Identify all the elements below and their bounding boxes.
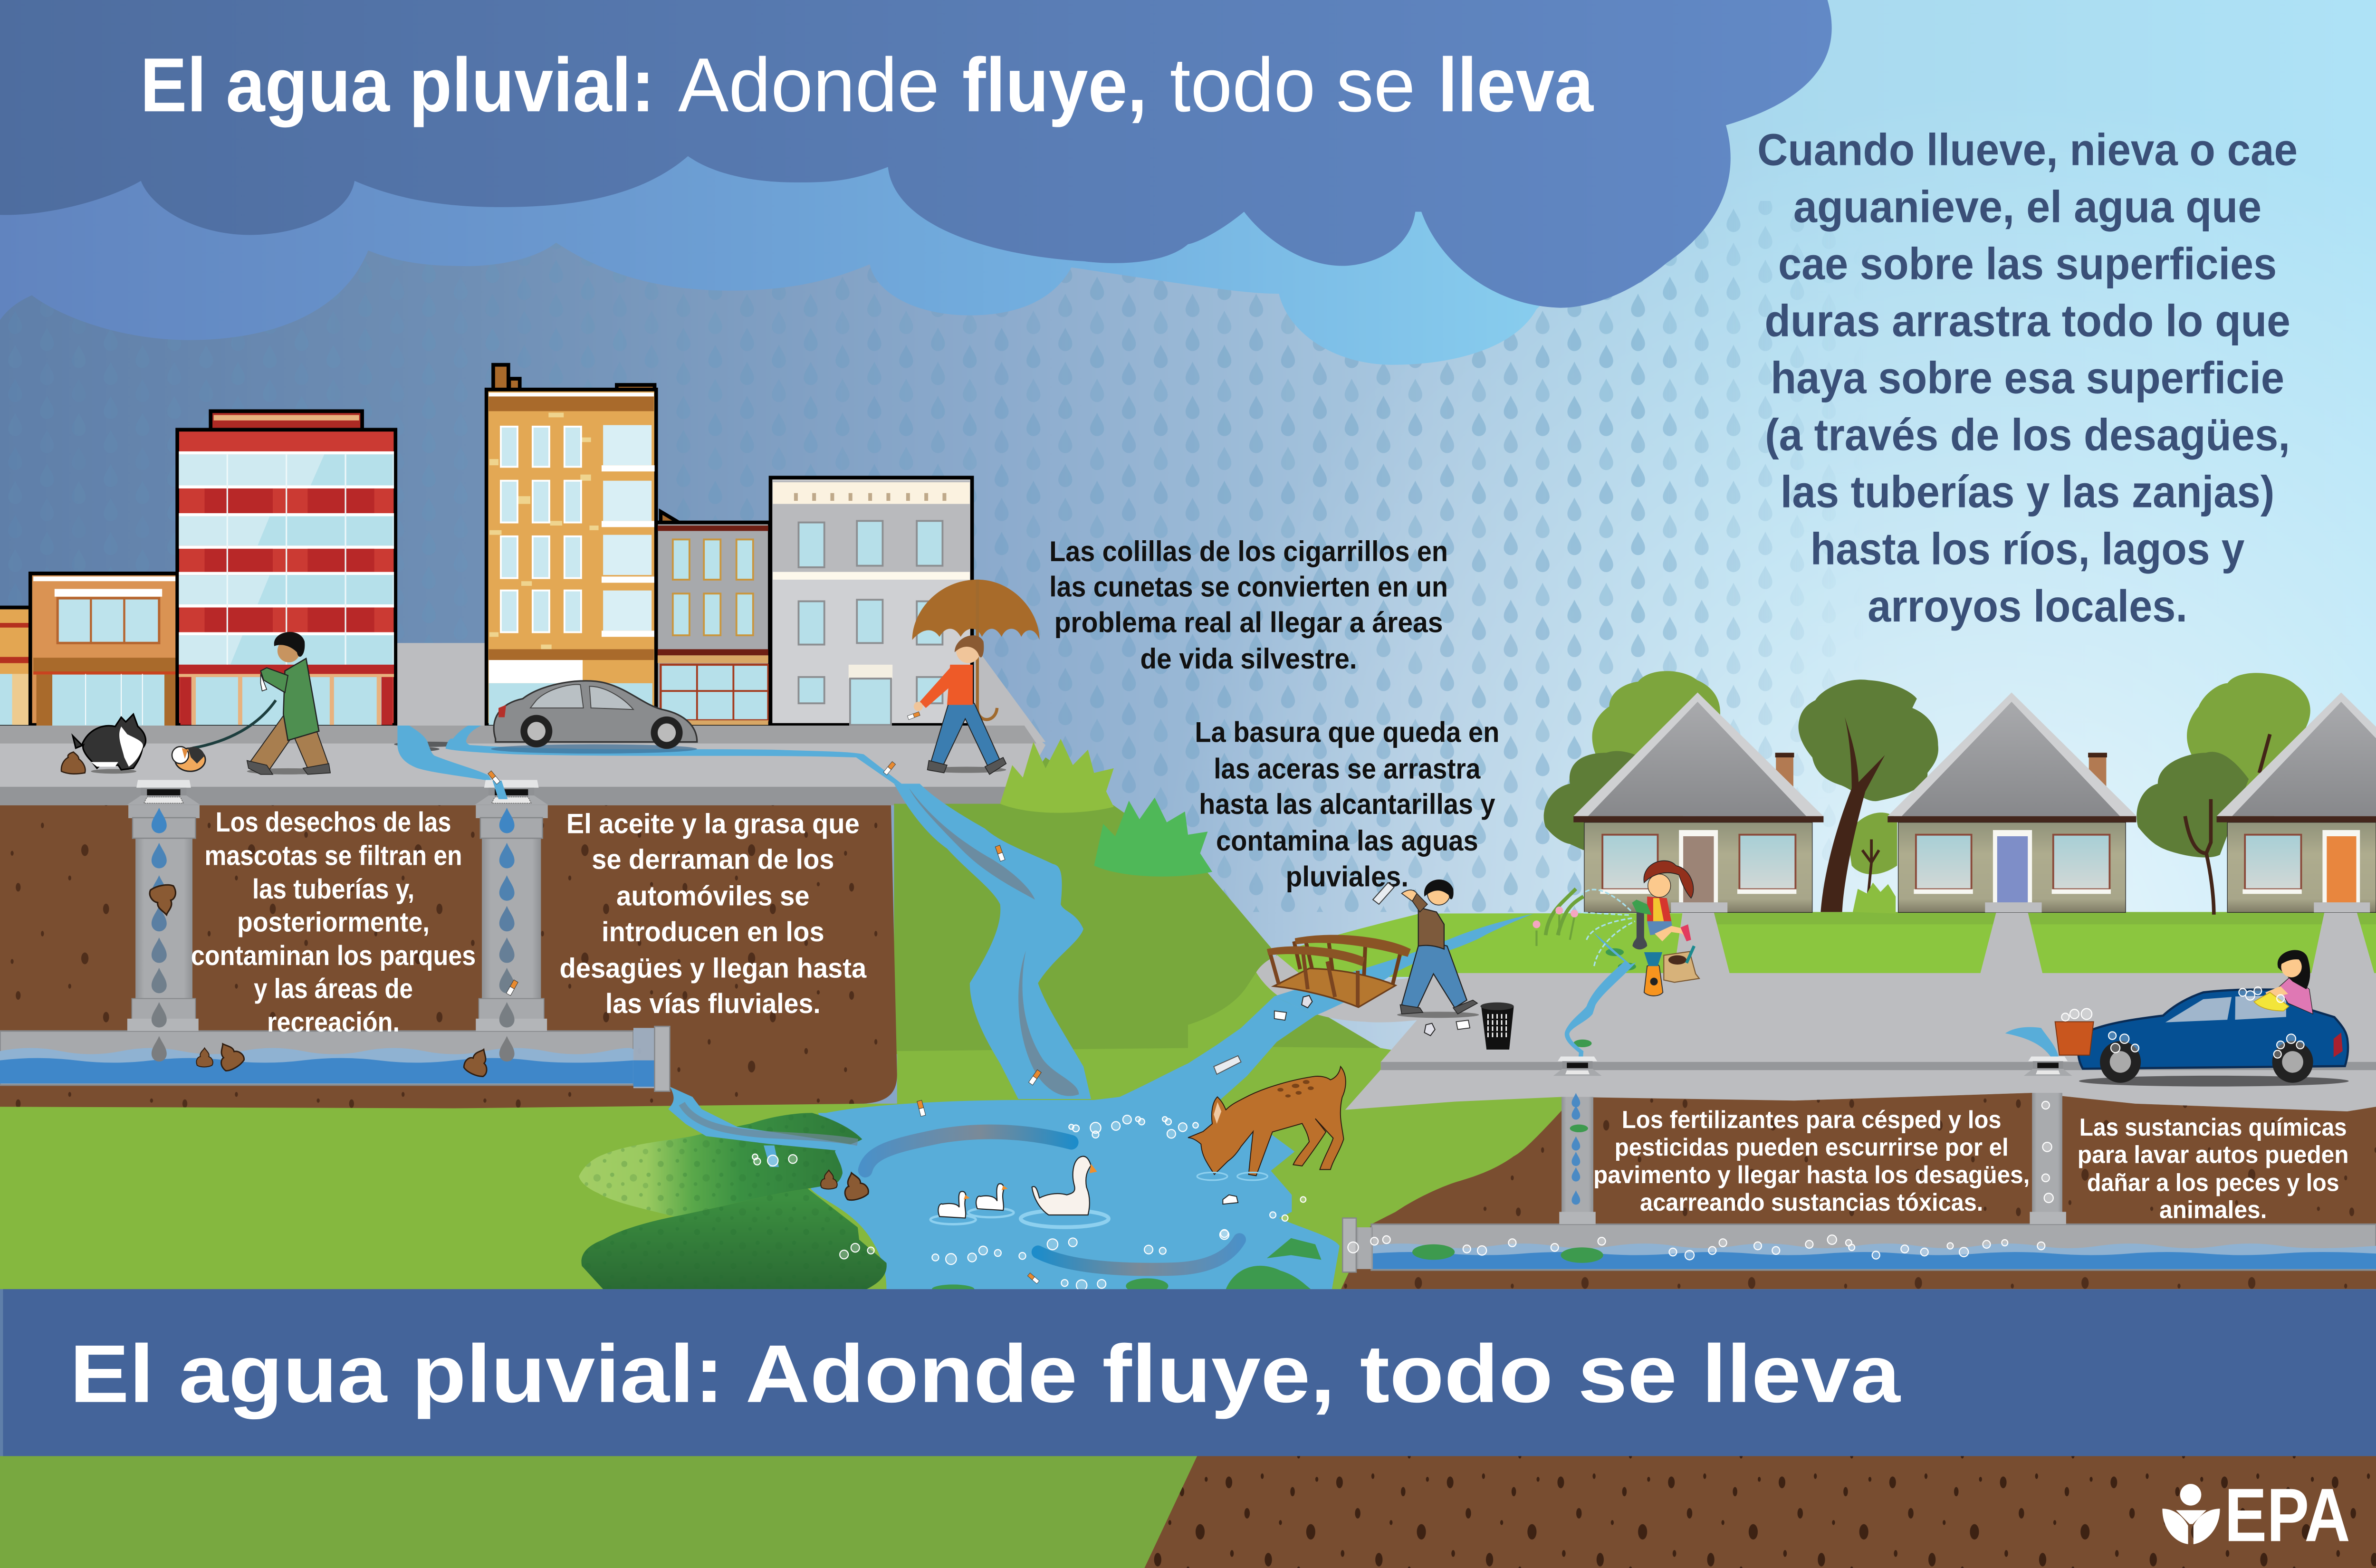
- text: car wash chemicals: dañar a los peces y los: [2087, 1168, 2339, 1196]
- building: red tower: [177, 411, 395, 725]
- text: litter: [1195, 716, 1499, 893]
- intro paragraph: (a través de los desagües,: [1765, 410, 2290, 460]
- bottom banner: El agua pluvial: Adonde fluye, todo se lleva: [70, 1328, 1901, 1420]
- house 3: [2217, 692, 2376, 912]
- building: small brick edge: [0, 607, 37, 725]
- gutter water on upper street: [394, 726, 901, 792]
- text: cigarette butts: Las colillas de los cigarrillos en: [1049, 535, 1448, 567]
- text: pet waste: las tuberías y,: [252, 874, 414, 905]
- text: pet waste: contaminan los parques: [191, 940, 476, 971]
- text: litter: contamina las aguas: [1216, 824, 1478, 857]
- tree: right dark: [2136, 752, 2249, 857]
- hill: [894, 757, 1380, 1063]
- front storm cloud: [0, 0, 1832, 308]
- rain drops: [741, 201, 1828, 912]
- text: oil and grease: El aceite y la grasa que: [566, 809, 860, 840]
- text: fertilizers: [1593, 1106, 2030, 1216]
- road right: [1256, 955, 2376, 1111]
- text: fertilizers: acarreando sustancias tóxicas.: [1640, 1188, 1983, 1216]
- text: oil and grease: [559, 809, 867, 1019]
- text: cigarette butts: problema real al llegar a áreas: [1054, 606, 1443, 639]
- storm drain column right 2: [2030, 1093, 2066, 1224]
- fertilizer sack: [1664, 946, 1699, 982]
- tree: left light: [1592, 671, 1720, 819]
- title: fluye,: [962, 42, 1147, 128]
- bubbles: soap and chemicals in water: [752, 1115, 2045, 1291]
- soil left block: [0, 805, 897, 1109]
- title: lleva: [1438, 42, 1594, 128]
- swan family: [930, 1157, 1109, 1227]
- left pipe with stormwater: [0, 1026, 670, 1091]
- storm drain column 1: [127, 780, 200, 1061]
- text: car wash chemicals: para lavar autos pueden: [2078, 1140, 2349, 1168]
- tree: right trunks: [2185, 734, 2270, 915]
- lawn right: [1276, 912, 2376, 977]
- text: car wash chemicals: animales.: [2159, 1195, 2267, 1224]
- pipe outlet flow: [668, 1087, 858, 1167]
- bush: beside house 2: [1853, 883, 1896, 914]
- text: pet waste: mascotas se filtran en: [204, 841, 462, 871]
- bucket of soapy water: [2055, 1009, 2094, 1055]
- garden flowers: [1533, 889, 1583, 946]
- person walking dogs: [192, 632, 330, 774]
- building: orange shop: [30, 574, 180, 726]
- intro paragraph: hasta los ríos, lagos y: [1811, 524, 2244, 574]
- text: litter: hasta las alcantarillas y: [1199, 788, 1495, 820]
- dog: small beagle: [172, 746, 205, 771]
- person with umbrella: [907, 580, 1040, 774]
- bottom banner: [3, 1289, 2376, 1457]
- dog: black and white: [73, 714, 146, 774]
- pesticide bottle: [1644, 952, 1663, 996]
- intro paragraph: cae sobre las superficies: [1778, 239, 2277, 289]
- intro paragraph: [1757, 124, 2298, 631]
- right pipe with stormwater: [1342, 1218, 2376, 1272]
- text: oil and grease: automóviles se: [616, 881, 810, 912]
- title: Adonde: [678, 42, 939, 128]
- building: grey narrow: [656, 512, 770, 725]
- child watering lawn: [1570, 860, 1694, 966]
- sidewalk upper: [0, 726, 1045, 805]
- pet waste on sidewalk: [61, 752, 85, 774]
- oil slicks: [865, 788, 1239, 1270]
- algae patches in water and pipe: [932, 948, 1636, 1294]
- house 1: [1573, 692, 1823, 912]
- intro paragraph: aguanieve, el agua que: [1793, 182, 2261, 232]
- text: fertilizers: pesticidas pueden escurrirse por el: [1615, 1133, 2009, 1161]
- lower grass: [0, 1046, 1576, 1289]
- title: El agua pluvial:: [140, 42, 655, 128]
- text: pet waste: recreación.: [267, 1007, 400, 1038]
- text: litter: La basura que queda en: [1195, 716, 1499, 748]
- EPA logo: [2162, 1473, 2350, 1558]
- storm drain column right 1: [1559, 1093, 1596, 1224]
- storm drain column 2: [475, 780, 548, 1061]
- EPA logo: EPA: [2224, 1473, 2350, 1558]
- text: pet waste: y las áreas de: [254, 974, 413, 1004]
- woman washing car: [2239, 950, 2313, 1014]
- text: cigarette butts: [1049, 535, 1448, 675]
- intro paragraph: duras arrastra todo lo que: [1764, 296, 2290, 346]
- tree: small bare: [1862, 839, 1879, 893]
- tree: centre trunk: [1820, 717, 1885, 912]
- footer soil: [1144, 1456, 2376, 1568]
- car: grey: [491, 681, 697, 754]
- text: oil and grease: las vías fluviales.: [605, 989, 821, 1019]
- tree: left dark: [1544, 751, 1667, 850]
- man littering: [1373, 880, 1479, 1018]
- intro paragraph: arroyos locales.: [1868, 581, 2187, 631]
- stream from lawn to bridge: [1274, 914, 1533, 1015]
- lake: [811, 996, 1340, 1289]
- road grates: [1553, 1057, 2072, 1076]
- bush: yellow-green: [1000, 739, 1114, 813]
- footbridge: [1267, 935, 1411, 1007]
- intro paragraph: Cuando llueve, nieva o cae: [1757, 124, 2298, 175]
- algae bloom: [579, 1113, 887, 1289]
- text: litter: pluviales.: [1286, 860, 1408, 893]
- text: pet waste: [191, 807, 476, 1038]
- tree: centre dark: [1799, 679, 1938, 801]
- tree: centre light: [1847, 813, 1897, 874]
- text: pet waste: posteriormente,: [237, 907, 430, 937]
- intro paragraph: haya sobre esa superficie: [1771, 353, 2284, 403]
- car: blue being washed: [2078, 990, 2349, 1087]
- tree: right light: [2187, 673, 2310, 819]
- text: car wash chemicals: [2078, 1113, 2349, 1224]
- runoff stream on road: [1565, 932, 1636, 1069]
- trash can and litter: [1214, 995, 1514, 1204]
- pollutants: pet waste and cigarette butts: [196, 762, 1041, 1284]
- text: cigarette butts: de vida silvestre.: [1140, 642, 1357, 675]
- title: [140, 42, 1594, 128]
- title: todo se: [1170, 42, 1415, 128]
- text: oil and grease: introducen en los: [602, 917, 824, 947]
- car wash runoff: [2005, 1027, 2060, 1061]
- bush: green: [1094, 798, 1212, 877]
- soil right block: [1341, 1093, 2376, 1289]
- intro paragraph: las tuberías y las zanjas): [1781, 467, 2274, 517]
- text: pet waste: Los desechos de las: [216, 807, 451, 838]
- house 2: [1887, 692, 2136, 912]
- text: fertilizers: pavimento y llegar hasta los desagües,: [1593, 1160, 2030, 1188]
- text: oil and grease: desagües y llegan hasta: [559, 953, 867, 984]
- text: car wash chemicals: Las sustancias químicas: [2079, 1113, 2347, 1141]
- text: fertilizers: Los fertilizantes para césped y los: [1622, 1106, 2002, 1133]
- stream down the hill: [894, 784, 1091, 1099]
- deer: [1188, 1067, 1346, 1180]
- building: light grey: [770, 478, 972, 725]
- trees behind houses: [1544, 671, 2310, 915]
- street behind buildings: [397, 643, 1045, 742]
- text: cigarette butts: las cunetas se convierten en un: [1049, 571, 1448, 603]
- back storm cloud: [0, 0, 1667, 365]
- text: oil and grease: se derraman de los: [592, 844, 834, 875]
- icon: EPA flower: [2162, 1484, 2220, 1544]
- text: litter: las aceras se arrastra: [1214, 753, 1481, 785]
- footer grass: [0, 1456, 1205, 1568]
- building: tan brick tower: [487, 365, 656, 725]
